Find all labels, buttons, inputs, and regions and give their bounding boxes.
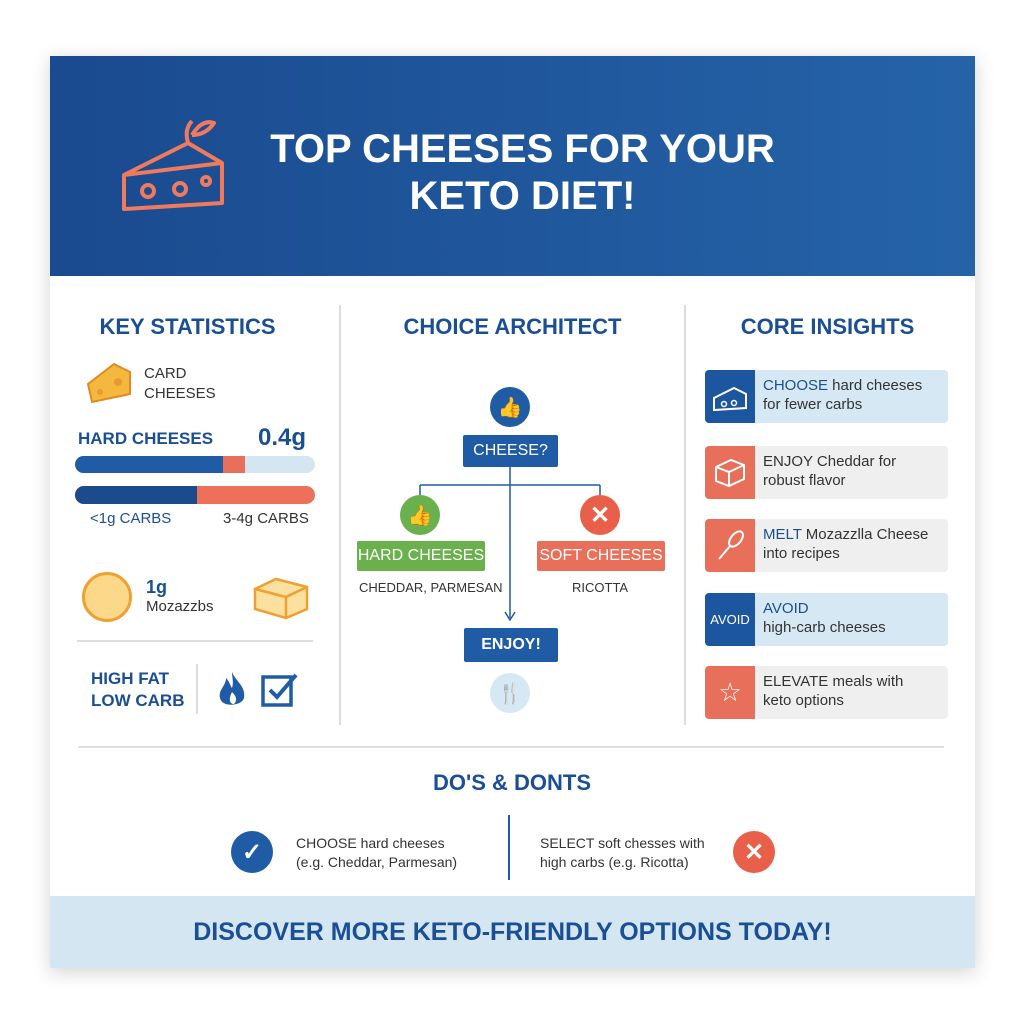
icon: thumbs up (490, 387, 530, 427)
title: KETO DIET! (410, 174, 635, 218)
title (270, 127, 775, 218)
box: hard cheeses: HARD CHEESES (358, 547, 484, 564)
icon: mozzarella ball (82, 572, 132, 622)
box: enjoy: ENJOY! (481, 636, 541, 653)
icon: check: ✓ (242, 838, 262, 866)
heading: CHOICE ARCHITECT (404, 314, 621, 339)
box: hard cheeses (357, 541, 485, 571)
dont text: SELECT soft chesses with (540, 835, 705, 851)
box: cheese?: CHEESE? (473, 442, 548, 459)
icon: checkbox (261, 674, 298, 707)
value: 0.4g (258, 424, 306, 451)
text: mozzarella: Mozazzbs (146, 598, 214, 615)
heading: KEY STATISTICS (99, 314, 276, 339)
insight 1 (705, 370, 948, 423)
insight 4: AVOID (710, 612, 750, 627)
text: mozzarella: 1g (146, 577, 167, 597)
insight 2 (705, 446, 948, 499)
text: card cheeses: CHEESES (144, 385, 216, 402)
insight 5: ☆ (718, 677, 742, 707)
text: card cheeses (144, 365, 216, 402)
heading: CORE INSIGHTS (741, 314, 914, 339)
insight 3 (705, 519, 948, 572)
icon: red x: ✕ (590, 502, 610, 528)
bar labels: <1g CARBS (90, 510, 171, 527)
bar chart (75, 456, 315, 504)
heading: DO'S & DONTS (433, 770, 591, 795)
insight 5 (705, 666, 948, 719)
insight 2: ENJOY Cheddar for (763, 453, 896, 470)
insight 1: CHOOSE hard cheeses (763, 377, 922, 394)
icon: fork and knife: 🍴 (498, 682, 522, 704)
panel: key statistics (75, 314, 315, 714)
icon: green thumb: 👍 (408, 504, 432, 526)
do text: CHOOSE hard cheeses (296, 835, 445, 851)
insight 3: into recipes (763, 545, 840, 562)
footer banner: DISCOVER MORE KETO-FRIENDLY OPTIONS TODAY! (193, 918, 832, 946)
flow lines (419, 467, 601, 622)
box: cheese? (463, 435, 558, 467)
box: soft cheeses: SOFT CHEESES (539, 547, 663, 564)
insight 4 (705, 593, 948, 646)
panel: choice architect (357, 314, 665, 713)
hard cheeses label: HARD CHEESES (78, 429, 213, 448)
icon: cheese wedge (86, 362, 131, 404)
high fat low carb: LOW CARB (91, 691, 184, 710)
dont text (540, 835, 705, 870)
icon: cheese block (254, 578, 308, 620)
insight 3: MELT Mozazzlla Cheese (763, 526, 928, 543)
do text: (e.g. Cheddar, Parmesan) (296, 854, 457, 870)
box: enjoy (464, 628, 558, 662)
icon: flame (220, 672, 244, 705)
footer banner (50, 896, 975, 968)
insight 2: robust flavor (763, 472, 846, 489)
icon: thumbs up: 👍 (498, 396, 522, 418)
insight 1: for fewer carbs (763, 396, 862, 413)
icon: red x (580, 495, 620, 535)
insight 5: keto options (763, 692, 844, 709)
do text (296, 835, 457, 870)
insight 4: AVOID (763, 600, 809, 617)
examples: CHEDDAR, PARMESAN (359, 580, 503, 595)
text: card cheeses: CARD (144, 365, 187, 382)
title: TOP CHEESES FOR YOUR (270, 127, 775, 171)
panel: key statistics: 3-4g CARBS (223, 510, 309, 527)
section: do's and donts (231, 770, 775, 880)
icon: check (231, 831, 273, 873)
icon: cheese (122, 120, 224, 211)
insight 4: high-carb cheeses (763, 619, 886, 636)
icon: fork and knife (490, 673, 530, 713)
high fat low carb (91, 669, 184, 710)
header banner (50, 56, 975, 276)
icon: green thumb (400, 495, 440, 535)
dont text: high carbs (e.g. Ricotta) (540, 854, 689, 870)
insight 5: ELEVATE meals with (763, 673, 903, 690)
icon: x (733, 831, 775, 873)
high fat low carb: HIGH FAT (91, 669, 169, 688)
box: soft cheeses (537, 541, 665, 571)
icon: x: ✕ (744, 838, 764, 866)
divider lines (339, 305, 341, 725)
panel: choice architect: RICOTTA (572, 580, 628, 595)
text: mozzarella (146, 577, 214, 615)
